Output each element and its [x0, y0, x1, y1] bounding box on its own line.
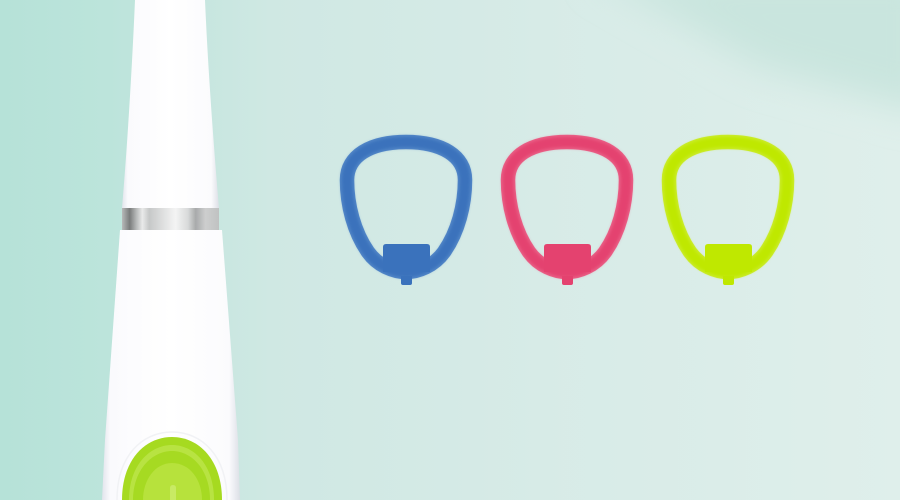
metal band [122, 208, 219, 230]
ring: lime [669, 142, 787, 285]
toothbrush [102, 0, 240, 500]
brush neck [122, 0, 219, 208]
button mark [170, 485, 176, 500]
button dark ring [133, 451, 210, 500]
button light ring [129, 445, 214, 500]
button outer rim [122, 437, 222, 500]
button [117, 432, 227, 500]
ring: blue [347, 142, 465, 285]
brush handle [102, 230, 240, 500]
ring: pink [508, 142, 626, 285]
button halo [117, 432, 227, 500]
button inner face [143, 463, 202, 500]
